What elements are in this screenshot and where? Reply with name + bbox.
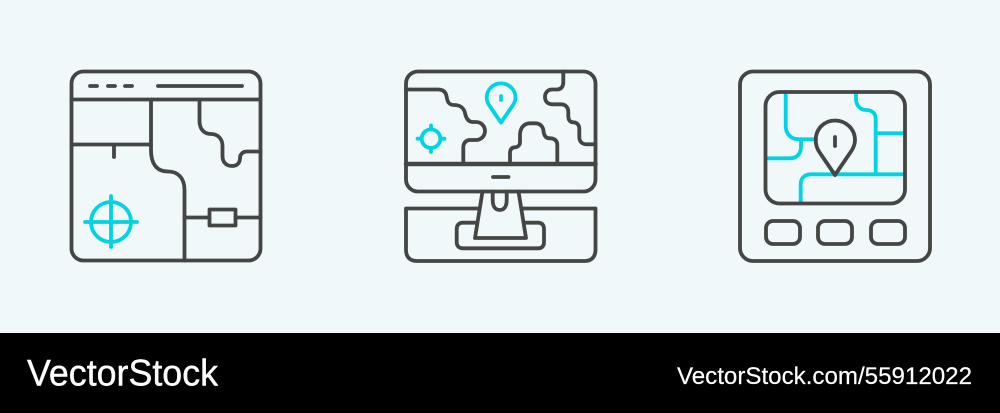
- cyan road lines: [768, 92, 903, 203]
- icon: cyan target gear: [418, 126, 444, 152]
- icon: cyan map pin: [487, 83, 516, 122]
- image url text: VectorStock.com/55912022: [677, 363, 972, 390]
- icon: cyan crosshair: [85, 196, 137, 247]
- device buttons: [766, 221, 905, 244]
- icon: desktop computer map: [406, 72, 596, 261]
- icon: GPS navigator device: [740, 72, 930, 261]
- logo text: VectorStock: [27, 352, 218, 394]
- footer bar: [0, 333, 1000, 413]
- icon: browser window map: [72, 72, 260, 260]
- dark map pin: [816, 120, 855, 175]
